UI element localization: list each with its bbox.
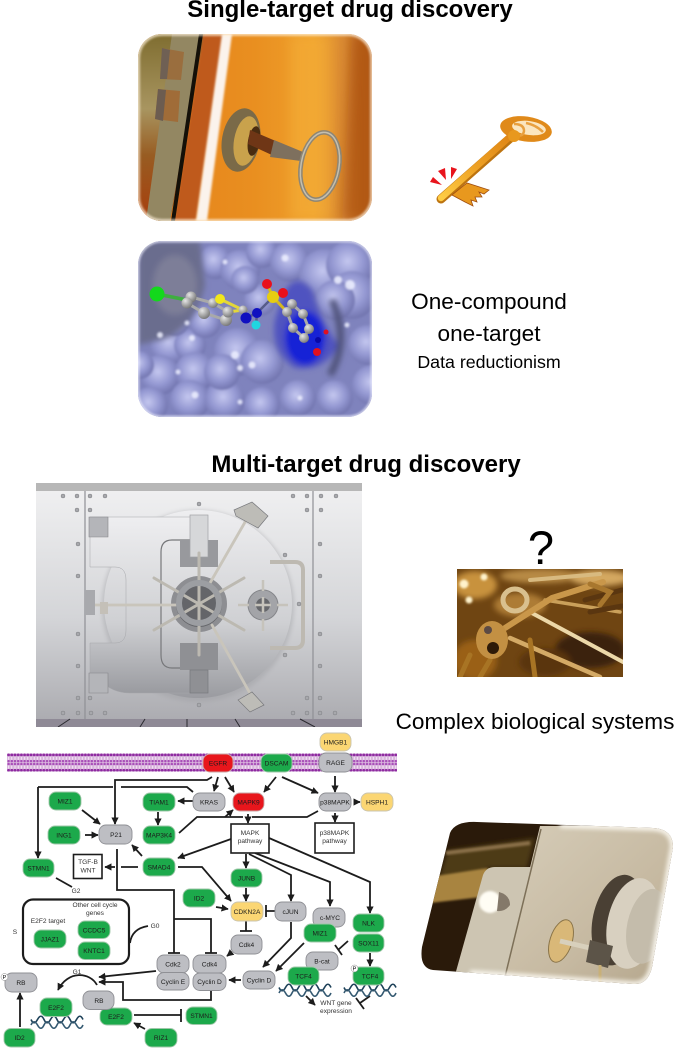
node: p38MAPK: p38MAPK [320, 800, 350, 806]
image: ligand molecule docked in a protein pocket [138, 241, 372, 417]
node: RB bound [83, 991, 114, 1010]
text: question mark: ? [528, 521, 554, 574]
box: TGF-B WNT: TGF-B [78, 859, 98, 866]
node: cJUN: cJUN [282, 909, 299, 916]
text: one-compound one-target data reductionism: Data reductionism [417, 352, 561, 372]
node: RIZ1 [145, 1028, 177, 1047]
node: HMGB1: HMGB1 [324, 740, 348, 746]
node: P21: P21 [110, 832, 122, 839]
node: B-cat: B-cat [314, 958, 330, 966]
node: c-MYC [313, 908, 345, 927]
node: Cyclin D right: Cyclin D [247, 978, 272, 984]
node: EGFR [203, 754, 233, 772]
text: one-compound one-target data reductionism: one-target [438, 321, 541, 346]
node: NLK: NLK [362, 920, 376, 928]
label: WNT gene expression: WNT gene [320, 1000, 352, 1007]
node: B-cat [306, 952, 338, 970]
label: S phase: S [13, 929, 18, 936]
node: TCF4 right phosphorylated [351, 965, 384, 985]
node: KNTC1: KNTC1 [83, 948, 105, 955]
node: CDKN2A: CDKN2A [234, 909, 261, 916]
node: Cdk4 and Cyclin D complex [193, 955, 226, 990]
node: SOX11 [353, 934, 384, 952]
node: P21 [99, 825, 132, 844]
text: one-compound one-target data reductionism [411, 289, 567, 372]
node: Cdk2 and Cyclin E complex: Cyclin E [161, 979, 186, 986]
node: CCDC5 [78, 921, 110, 938]
node: NLK [353, 914, 384, 932]
node: HSPH1: HSPH1 [366, 800, 388, 806]
node: RB bound: RB [94, 998, 104, 1005]
node: MAP3K4 [143, 826, 175, 844]
node: TIAM1 [143, 793, 175, 811]
node: TIAM1: TIAM1 [149, 800, 169, 806]
node: Cdk2 and Cyclin E complex: Cdk2 [165, 962, 181, 968]
node: E2F2 left [40, 998, 72, 1016]
node: JJAZ1: JJAZ1 [41, 936, 60, 944]
node: EGFR: EGFR [209, 760, 227, 768]
box: MAPK pathway [231, 824, 269, 853]
node: KRAS: KRAS [200, 800, 219, 806]
node: MIZ1 left [49, 792, 81, 810]
node: SOX11: SOX11 [358, 940, 379, 948]
node: phosphorylated RB: RB [16, 980, 26, 987]
node: E2F2 lower [100, 1008, 132, 1025]
dna strands [31, 984, 396, 1028]
label: G2: G2 [72, 888, 81, 895]
photo: pile of brass keys [453, 569, 630, 680]
node: MIZ1 left: MIZ1 [57, 798, 73, 806]
icon: golden key with red sparks [430, 113, 553, 206]
label: WNT gene expression [320, 1000, 352, 1015]
node: c-MYC: c-MYC [320, 915, 340, 922]
photo: safe with key in lock, tilted [421, 822, 673, 984]
node: Cyclin D right [243, 971, 275, 989]
node: E2F2 lower: E2F2 [108, 1014, 124, 1021]
title: multi-target drug discovery: Multi-target drug discovery [211, 451, 521, 478]
node: HSPH1 [361, 793, 393, 811]
node: CCDC5: CCDC5 [83, 928, 106, 934]
node: Cdk4 upper: Cdk4 [239, 942, 255, 949]
node: TCF4 right phosphorylated: TCF4 [362, 974, 379, 980]
label: G0: G0 [151, 923, 160, 930]
node: MAPK9: MAPK9 [237, 800, 260, 806]
chart: cell signalling pathway network [1, 733, 397, 1047]
node: ING1 [48, 826, 80, 844]
node: JUNB [231, 869, 262, 887]
box: MAPK pathway: pathway [238, 838, 263, 845]
node: ID2 lower [4, 1028, 35, 1047]
node: JJAZ1 [34, 930, 66, 948]
label: other cell cycle genes: genes [86, 910, 105, 917]
node: SMAD4 [143, 858, 175, 876]
node: STMN1 upper [23, 859, 54, 877]
box: MAPK pathway: MAPK [241, 830, 260, 837]
node: Cdk4 and Cyclin D complex: Cdk4 [202, 962, 218, 968]
node: TCF4 left: TCF4 [295, 974, 312, 980]
node: RAGE: RAGE [326, 760, 345, 767]
label: E2F2 target: E2F2 target [31, 918, 65, 925]
label: G1: G1 [73, 969, 82, 976]
node: ING1: ING1 [56, 832, 72, 840]
node: phosphorylated RB [1, 973, 37, 992]
node: phosphorylated RB: P [3, 975, 7, 981]
box: p38MAPK pathway: pathway [322, 838, 347, 845]
node: Cdk2 and Cyclin E complex [157, 955, 189, 990]
text: one-compound one-target data reductionism: One-compound [411, 289, 567, 314]
box: TGF-B WNT: WNT [80, 868, 96, 874]
photo: steel bank vault door [36, 483, 362, 727]
node: JUNB: JUNB [238, 876, 256, 882]
panel: cell cycle gene box [23, 900, 129, 964]
node: MAPK9 [233, 793, 264, 811]
node: KRAS [193, 793, 225, 811]
node: E2F2 left: E2F2 [48, 1005, 64, 1012]
node: ID2 middle [183, 889, 215, 907]
node: KNTC1 [78, 942, 110, 960]
box: TGF-B WNT [74, 854, 102, 878]
node: ID2 middle: ID2 [194, 896, 204, 902]
node: ID2 lower: ID2 [14, 1035, 25, 1042]
node: p38MAPK [319, 793, 351, 811]
node: SMAD4: SMAD4 [148, 864, 171, 872]
node: TCF4 left [288, 967, 319, 985]
node: RAGE [319, 753, 352, 772]
membrane: lipid bilayer [7, 754, 397, 772]
node: cJUN [275, 902, 306, 921]
node: Cdk4 and Cyclin D complex: Cyclin D [197, 979, 222, 986]
node: DSCAM: DSCAM [265, 760, 288, 768]
node: STMN1 lower [186, 1007, 217, 1024]
label: other cell cycle genes: Other cell cycle [72, 902, 118, 909]
arrows: pathway connectors [20, 776, 370, 1029]
node: MIZ1 right [304, 924, 336, 942]
text: complex biological systems: Complex biological systems [396, 709, 674, 734]
node: MAP3K4: MAP3K4 [146, 832, 172, 840]
node: HMGB1 [320, 733, 351, 751]
node: RIZ1: RIZ1 [154, 1035, 168, 1042]
node: STMN1 upper: STMN1 [27, 866, 50, 872]
label: other cell cycle genes [72, 902, 118, 917]
label: WNT gene expression: expression [320, 1008, 352, 1015]
photo: key in a door lock [138, 34, 372, 221]
node: DSCAM [261, 754, 292, 772]
node: CDKN2A [231, 902, 263, 921]
box: p38MAPK pathway [315, 823, 354, 853]
node: TCF4 right phosphorylated: P [353, 966, 357, 972]
node: STMN1 lower: STMN1 [190, 1013, 213, 1020]
box: p38MAPK pathway: p38MAPK [320, 830, 350, 837]
node: Cdk4 upper [231, 935, 262, 954]
node: MIZ1 right: MIZ1 [312, 930, 328, 938]
